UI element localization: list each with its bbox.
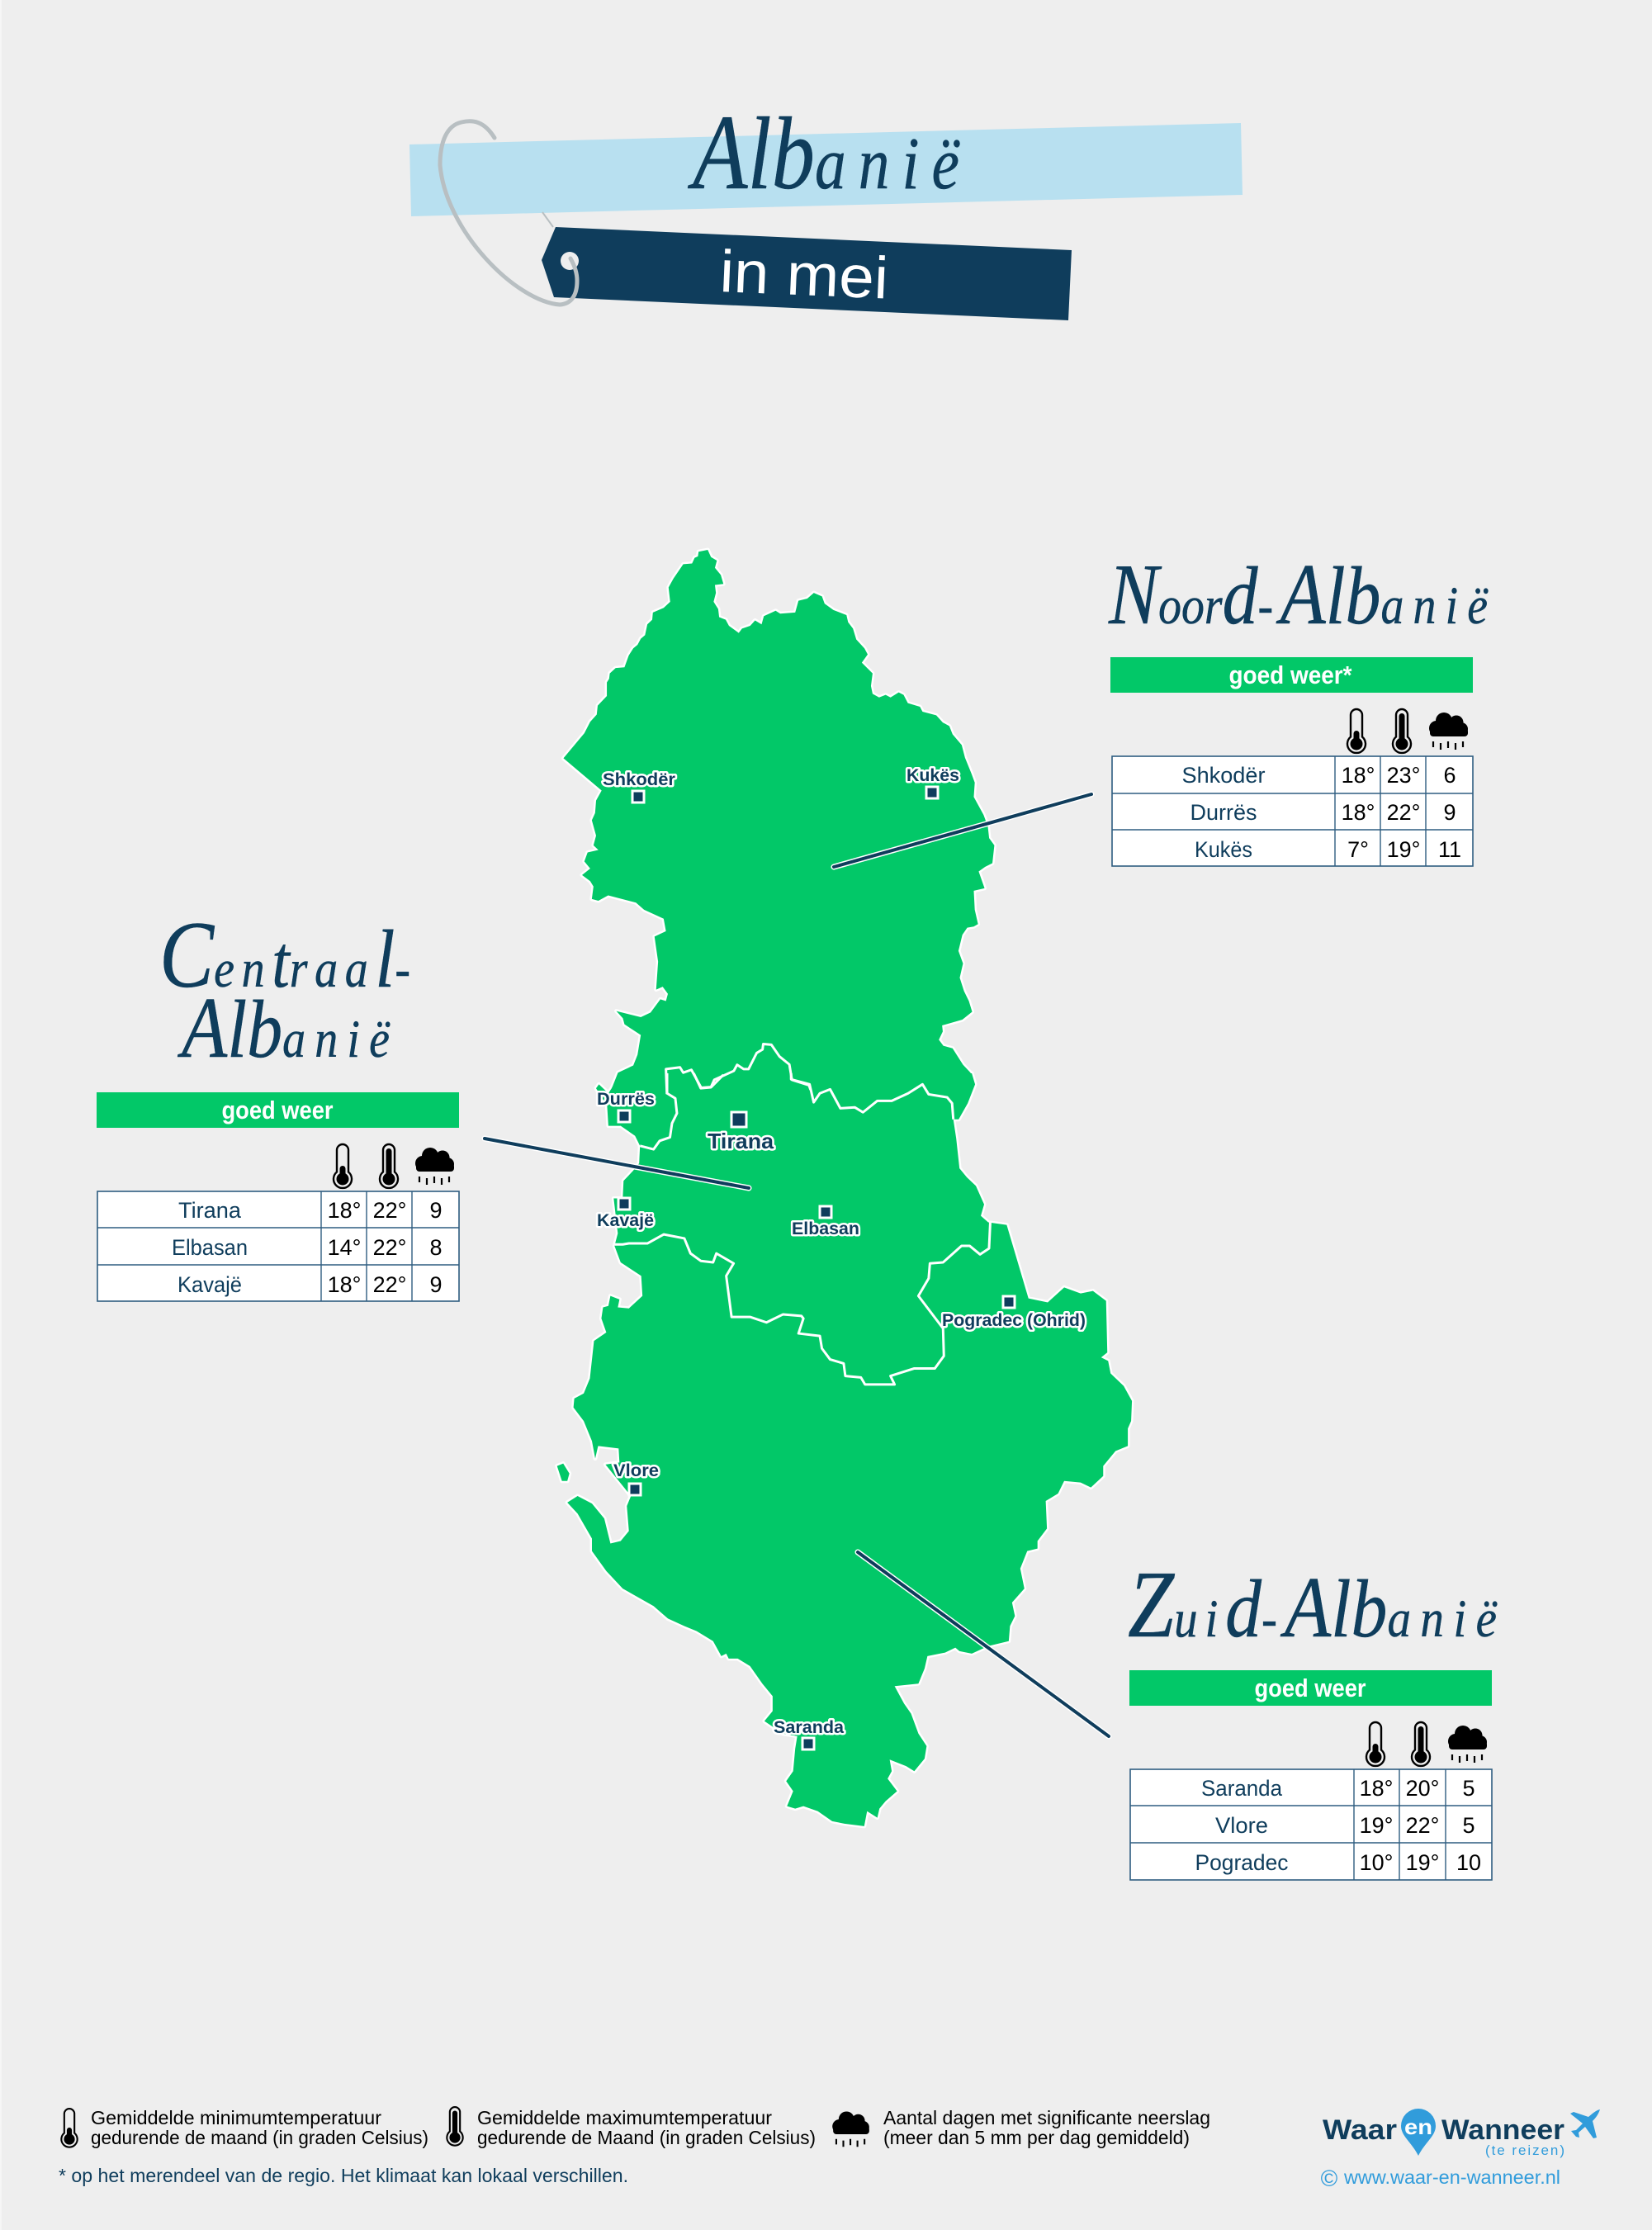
table: 8: [429, 1235, 443, 1260]
city: Tirana: Tirana: [708, 1129, 774, 1153]
table: 22°: [373, 1198, 406, 1223]
table: 19°: [1406, 1850, 1439, 1875]
heading: Centraal-: Centraal-: [159, 902, 410, 1007]
weather bar: [1129, 1670, 1492, 1706]
legend text: minimum temperature: gedurende de maand (in graden Celsius): [91, 2127, 428, 2148]
table: Shkodër: [1182, 763, 1265, 788]
table: Vlore: [1215, 1813, 1268, 1838]
table: 10°: [1360, 1850, 1393, 1875]
legend text: minimum temperature: [91, 2107, 428, 2148]
table: Saranda: [1201, 1776, 1283, 1801]
icon: max temperature: [1393, 709, 1411, 753]
table: 18°: [1342, 763, 1375, 788]
heading: Albanië: Albanië: [178, 979, 391, 1076]
icon: rain: [1429, 713, 1468, 750]
city: Vlore: Vlore: [613, 1461, 659, 1480]
table: 18°: [1360, 1776, 1393, 1801]
table: 9: [429, 1272, 443, 1297]
title: [409, 93, 1243, 320]
tag: dark blue: [542, 227, 1072, 320]
icon: max temperature: [1412, 1722, 1430, 1766]
city: Kukës: [906, 766, 959, 798]
region boundaries: [614, 1044, 990, 1385]
panel: Zuid-Albanië: [1128, 1552, 1498, 1880]
table: Tirana: [178, 1198, 242, 1223]
city: Durrës: [597, 1090, 655, 1122]
city: Tirana: [708, 1112, 774, 1153]
weather bar: [1110, 657, 1473, 693]
icon: legend max temperature: [447, 2107, 463, 2146]
connector: north: [834, 794, 1091, 867]
table: 5: [1462, 1813, 1475, 1838]
logo word: en: en: [1404, 2114, 1432, 2139]
metal ring: [440, 121, 577, 305]
legend: [59, 2107, 1210, 2186]
city: Elbasan: Elbasan: [792, 1219, 859, 1238]
legend text: maximum temperature: [477, 2107, 816, 2148]
table: Pogradec: [1195, 1850, 1288, 1875]
logo word: Wanneer: Wanneer: [1441, 2114, 1564, 2146]
city: Vlore: [613, 1461, 659, 1495]
heading: Albanië: Albanië: [687, 93, 960, 212]
table: 22°: [1406, 1813, 1439, 1838]
weather bar: goed weer*: [1228, 660, 1352, 689]
table: 18°: [328, 1198, 361, 1223]
connector: central: [485, 1139, 749, 1188]
subheading: in mei: in mei: [718, 239, 890, 312]
table: 14°: [328, 1235, 361, 1260]
icon: min temperature: [1366, 1722, 1385, 1766]
legend text: rain days: (meer dan 5 mm per dag gemiddeld): [883, 2127, 1190, 2148]
city: Pogradec (Ohrid): [942, 1296, 1086, 1330]
map fill: [557, 550, 1132, 1826]
heading: Zuid-Albanië: Zuid-Albanië: [1128, 1552, 1498, 1657]
legend text: maximum temperature: gedurende de Maand (in graden Celsius): [477, 2127, 816, 2148]
table: 10: [1456, 1850, 1481, 1875]
tag hole: [561, 252, 579, 270]
table: Kukës: [1195, 837, 1252, 862]
table: 6: [1443, 763, 1456, 788]
legend text: rain days: Aantal dagen met significante neerslag: [883, 2107, 1210, 2128]
table: 22°: [373, 1272, 406, 1297]
city: Saranda: Saranda: [774, 1718, 844, 1737]
legend text: maximum temperature: Gemiddelde maximumtemperatuur: [477, 2107, 772, 2128]
table: 9: [1443, 800, 1456, 825]
icon: location pin: [1401, 2109, 1436, 2156]
table: 22°: [373, 1235, 406, 1260]
city: Saranda: [774, 1718, 844, 1749]
icon: max temperature: [380, 1144, 398, 1188]
weather bar: [97, 1092, 459, 1128]
icon: legend rain: [832, 2111, 869, 2147]
table: 18°: [328, 1272, 361, 1297]
map outline: [557, 550, 1132, 1826]
table: Durrës: [1190, 800, 1257, 825]
table: 20°: [1406, 1776, 1439, 1801]
table: Kavajë: [178, 1272, 242, 1297]
table: 11: [1438, 837, 1461, 862]
city: Pogradec (Ohrid): Pogradec (Ohrid): [942, 1311, 1086, 1330]
map of Albanië: [557, 550, 1132, 1826]
banner: light blue: [409, 123, 1243, 216]
table: [97, 1191, 459, 1301]
icon: legend min temperature: [61, 2109, 78, 2147]
panel: Noord-Albanië: [1108, 546, 1489, 866]
table: 9: [429, 1198, 443, 1223]
table: 23°: [1387, 763, 1420, 788]
table: [1112, 756, 1473, 866]
city: Kavajë: [597, 1198, 654, 1230]
icon: min temperature: [1347, 709, 1366, 753]
icon: rain: [1448, 1726, 1487, 1763]
icon: airplane: [1570, 2109, 1600, 2138]
footnote: * op het merendeel van de regio. Het klimaat kan lokaal verschillen.: [59, 2165, 628, 2186]
table: Elbasan: [172, 1235, 248, 1260]
city: Shkodër: Shkodër: [603, 770, 675, 789]
table: 22°: [1387, 800, 1420, 825]
legend text: minimum temperature: Gemiddelde minimumtemperatuur: [91, 2107, 381, 2128]
icon: min temperature: [334, 1144, 352, 1188]
logo word: Waar: Waar: [1323, 2114, 1397, 2146]
table: 19°: [1360, 1813, 1393, 1838]
tag string: [542, 212, 553, 227]
heading: Noord-Albanië: Noord-Albanië: [1108, 546, 1489, 642]
city: Shkodër: [603, 770, 675, 803]
city: Kukës: Kukës: [906, 766, 959, 785]
table: 7°: [1347, 837, 1369, 862]
city: Durrës: Durrës: [597, 1090, 655, 1109]
table: 19°: [1387, 837, 1420, 862]
weather bar: goed weer: [1255, 1674, 1366, 1702]
website: www.waar-en-wanneer.nl: [1343, 2166, 1560, 2188]
legend text: rain days: [883, 2107, 1210, 2148]
logo: Waar en Wanneer: [1321, 2109, 1600, 2191]
connector: south: [858, 1552, 1109, 1736]
icon: rain: [415, 1148, 454, 1185]
city: Elbasan: [792, 1206, 859, 1238]
table: [1130, 1769, 1492, 1880]
weather bar: goed weer: [221, 1096, 334, 1124]
table: 18°: [1342, 800, 1375, 825]
panel: Centraal-Albanië: [97, 902, 459, 1301]
icon: copyright: ©: [1321, 2166, 1338, 2191]
city: Kavajë: Kavajë: [597, 1211, 654, 1230]
logo tagline: (te reizen): [1485, 2142, 1564, 2158]
table: 5: [1462, 1776, 1475, 1801]
